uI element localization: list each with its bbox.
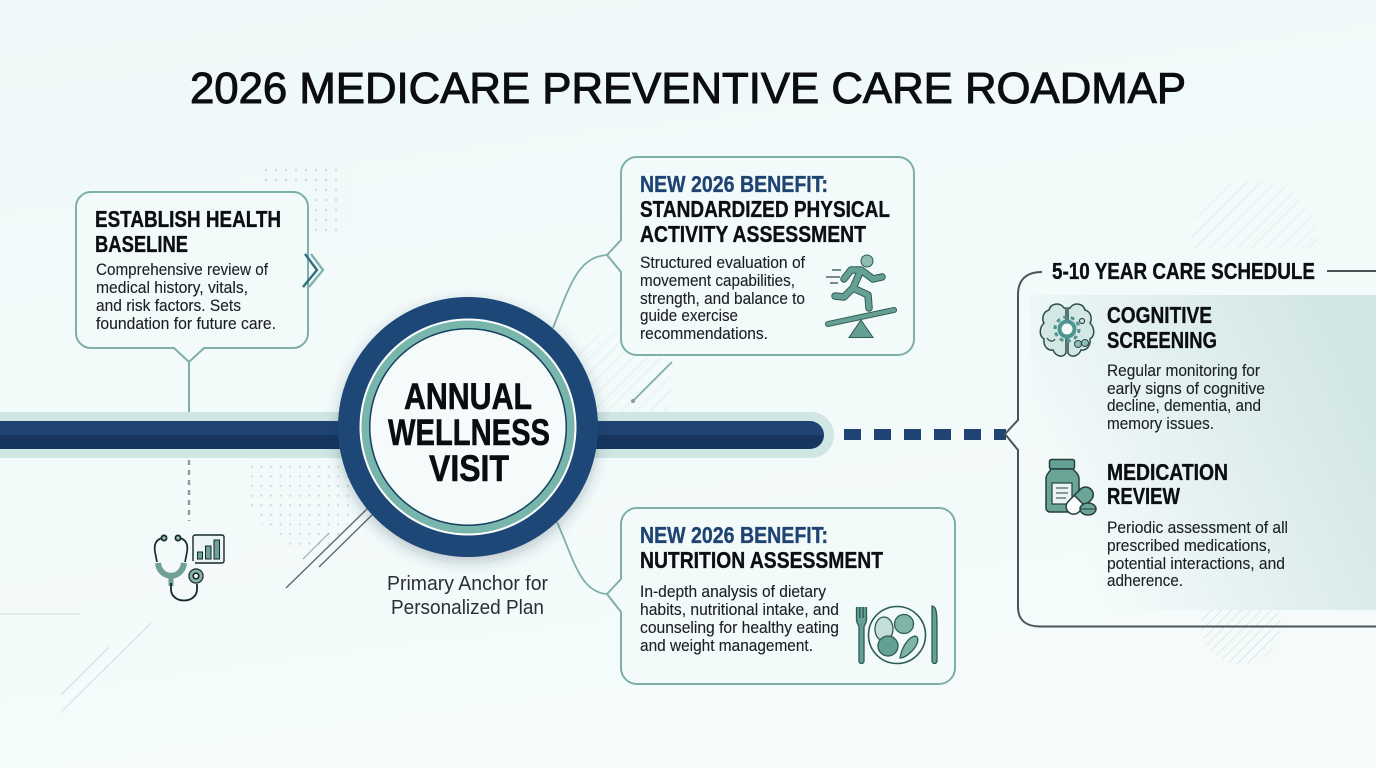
panel outline: care schedule bracket: [1005, 271, 1376, 626]
panel: nutrition assessment: [607, 508, 955, 684]
description: Regular monitoring for: [1107, 361, 1260, 380]
description: prescribed medications,: [1107, 536, 1271, 555]
description: memory issues.: [1107, 414, 1214, 433]
benefit label: NEW 2026 BENEFIT:: [640, 522, 828, 548]
description: [96, 260, 276, 333]
item: medication review: [1107, 459, 1288, 590]
heading: COGNITIVE: [1107, 302, 1212, 328]
circle label: WELLNESS: [388, 411, 550, 453]
icon: chevrons: [303, 254, 323, 287]
description: potential interactions, and: [1107, 554, 1285, 573]
heading: [1107, 459, 1228, 509]
panel: establish health baseline: [76, 192, 308, 362]
icon: plate with fork and knife: [856, 606, 937, 664]
heading line 2: BASELINE: [95, 231, 188, 257]
heading: [1107, 302, 1217, 353]
circle label: VISIT: [429, 447, 509, 489]
description: movement capabilities,: [640, 271, 795, 290]
title: 2026 MEDICARE PREVENTIVE CARE ROADMAP: [190, 64, 1186, 113]
description: recommendations.: [640, 324, 768, 343]
connector: baseline callout to bar: [188, 361, 190, 412]
dashed connector to care schedule: [844, 429, 1006, 440]
description: [640, 253, 805, 343]
description: Structured evaluation of: [640, 253, 805, 272]
connector curve: benefit 2: [557, 522, 607, 594]
icon: runner on balance board: [826, 255, 894, 338]
heading: ACTIVITY ASSESSMENT: [640, 221, 867, 247]
description: adherence.: [1107, 571, 1183, 590]
description: [1107, 361, 1265, 433]
caption: primary anchor: Primary Anchor for: [387, 573, 548, 595]
description: strength, and balance to: [640, 289, 805, 308]
heading: STANDARDIZED PHYSICAL: [640, 196, 890, 222]
description: foundation for future care.: [96, 314, 276, 333]
timeline bar: [0, 412, 834, 458]
description: and risk factors. Sets: [96, 296, 241, 315]
heading: REVIEW: [1107, 483, 1181, 509]
description: guide exercise: [640, 306, 738, 325]
caption: primary anchor: [387, 573, 548, 619]
dashed connector to stethoscope: [188, 460, 190, 521]
description: Comprehensive review of: [96, 260, 268, 279]
benefit label: NEW 2026 BENEFIT:: [640, 171, 828, 197]
description: [1107, 518, 1288, 590]
icon: medication bottle and pills: [1046, 460, 1096, 517]
description: early signs of cognitive: [1107, 379, 1265, 398]
circle label: ANNUAL: [404, 375, 532, 417]
caption: primary anchor: Personalized Plan: [391, 597, 544, 619]
heading: MEDICATION: [1107, 459, 1228, 485]
circle label: [388, 375, 550, 489]
heading: [640, 196, 890, 247]
description: In-depth analysis of dietary: [640, 582, 826, 601]
description: [640, 582, 839, 655]
care schedule heading: 5-10 YEAR CARE SCHEDULE: [1052, 258, 1315, 284]
heading: SCREENING: [1107, 327, 1217, 353]
central node: annual wellness visit: [338, 297, 598, 557]
item: cognitive screening: [1107, 302, 1265, 433]
description: and weight management.: [640, 636, 813, 655]
description: Periodic assessment of all: [1107, 518, 1288, 537]
heading: NUTRITION ASSESSMENT: [640, 547, 884, 573]
heading: ESTABLISH HEALTH: [95, 206, 281, 232]
description: decline, dementia, and: [1107, 396, 1261, 415]
icon: brain with gear: [1040, 304, 1094, 356]
panel: physical activity assessment: [607, 157, 914, 355]
description: medical history, vitals,: [96, 278, 248, 297]
icon: stethoscope and chart: [155, 535, 224, 600]
connector curve: benefit 1: [553, 255, 607, 328]
description: habits, nutritional intake, and: [640, 600, 839, 619]
description: counseling for healthy eating: [640, 618, 839, 637]
